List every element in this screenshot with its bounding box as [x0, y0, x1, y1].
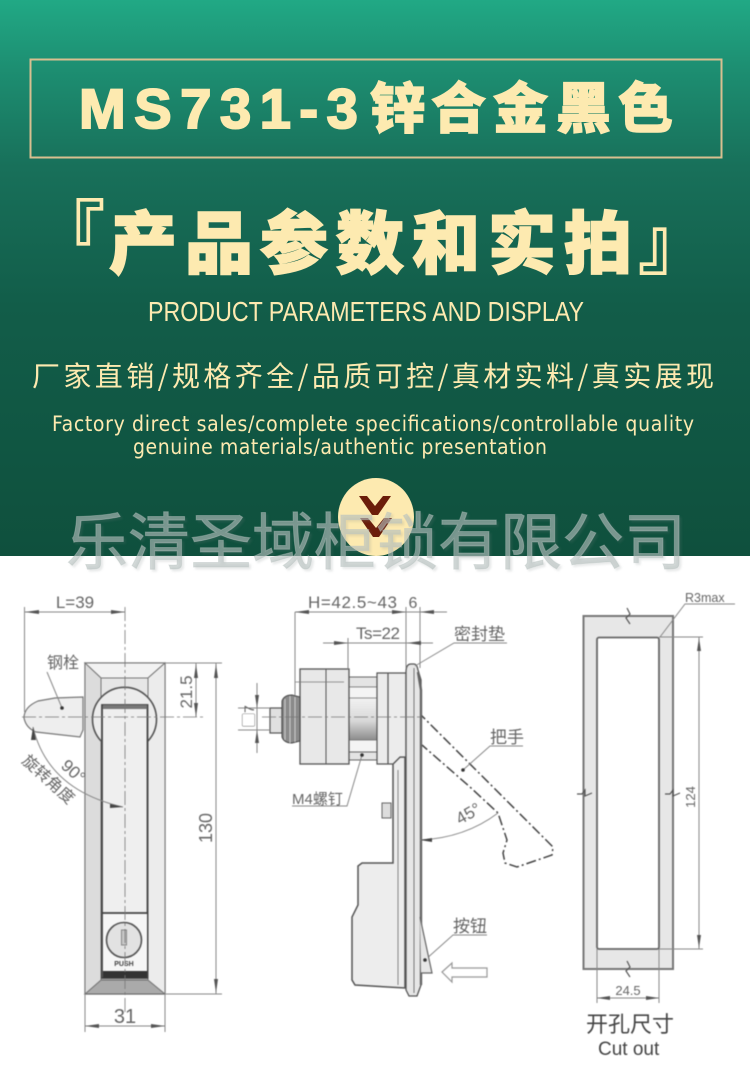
label: handle — [461, 728, 524, 772]
dimension 45 degrees — [420, 799, 498, 842]
small stud — [382, 803, 391, 818]
dimension 130 — [165, 663, 222, 994]
label: push button: 按钮 — [453, 917, 487, 936]
dimension 31 — [85, 994, 165, 1032]
dimension 21.5: 21.5 — [177, 675, 196, 709]
label: cut out english: Cut out — [598, 1039, 660, 1060]
dimension 130: 130 — [196, 813, 216, 843]
nut and screw stub — [270, 695, 300, 743]
dimension H and 6 — [295, 593, 447, 695]
dimension 45 degrees: 45° — [452, 799, 484, 828]
label: M4 screw: M4螺钉 — [292, 791, 343, 808]
heading bracket left: 『 — [35, 178, 105, 279]
dimension L=39 — [24, 593, 125, 712]
dimension 21.5 — [165, 663, 222, 717]
break marks — [577, 608, 680, 977]
dimension L=39: L=39 — [56, 593, 94, 612]
english feature line 1: Factory direct sales/complete specifications/controllable quality — [52, 412, 694, 436]
plate and opening — [584, 616, 673, 969]
lock body — [295, 669, 349, 764]
dimension square 7 — [238, 683, 270, 753]
dimension 124 — [659, 637, 703, 949]
latch pin — [24, 697, 83, 737]
horizontal centre line — [262, 716, 420, 718]
arrow: push direction — [442, 963, 487, 982]
dimension 31: 31 — [114, 1006, 136, 1028]
title: 锌合金黑色 — [370, 64, 673, 144]
english feature line 2: genuine materials/authentic presentation — [133, 435, 547, 459]
push label: PUSH — [114, 961, 134, 968]
dimension 24.5 — [597, 949, 659, 1003]
label: cut out chinese: 开孔尺寸 — [586, 1012, 674, 1037]
watermark: 乐清圣域柜锁有限公司 — [66, 492, 686, 582]
frame of handle — [85, 663, 165, 994]
chinese feature line: 厂家直销/规格齐全/品质可控/真材实料/真实展现 — [32, 355, 714, 395]
dimension square 7: ▢7 — [241, 705, 257, 727]
label: rotation angle: 旋转角度 — [18, 752, 78, 808]
handle swung open — [418, 712, 553, 867]
icon: down chevrons badge — [338, 478, 414, 556]
dimension H and 6: H=42.5~43 — [308, 593, 397, 612]
label: R3max: R3max — [685, 591, 725, 605]
panel: green header background — [0, 0, 750, 556]
drawing: cut out — [577, 591, 735, 1060]
label: pin: 钢栓 — [47, 654, 79, 672]
heading: product parameters and display: 产品参数和实拍 — [109, 189, 632, 288]
title: MS731-3 — [79, 77, 366, 140]
lower housing — [352, 757, 405, 988]
dimension Ts=22 — [323, 624, 433, 669]
label: seal gasket: 密封垫 — [454, 625, 505, 644]
rotation arc — [31, 727, 123, 808]
heading bracket right: 』 — [638, 188, 708, 289]
cylinder neck — [349, 677, 377, 760]
label: pin — [47, 654, 79, 710]
dimension Ts=22: Ts=22 — [356, 624, 400, 643]
label: handle: 把手 — [490, 728, 524, 747]
dimension 124: 124 — [683, 786, 698, 808]
label: R3max — [660, 591, 735, 637]
drawing: side view — [238, 593, 553, 996]
label: 90 degrees: 90° — [57, 756, 89, 787]
dimension 24.5: 24.5 — [615, 983, 641, 998]
label: push button — [420, 917, 487, 973]
english subheading: PRODUCT PARAMETERS AND DISPLAY — [148, 296, 584, 327]
flange — [377, 673, 406, 764]
label: seal gasket — [415, 625, 507, 666]
dimension H and 6: 6 — [409, 595, 418, 612]
title frame — [30, 60, 722, 158]
mounting plate — [406, 664, 421, 996]
centre lines — [22, 607, 204, 1015]
label: M4 screw — [292, 753, 364, 808]
drawing: front view — [18, 593, 222, 1032]
